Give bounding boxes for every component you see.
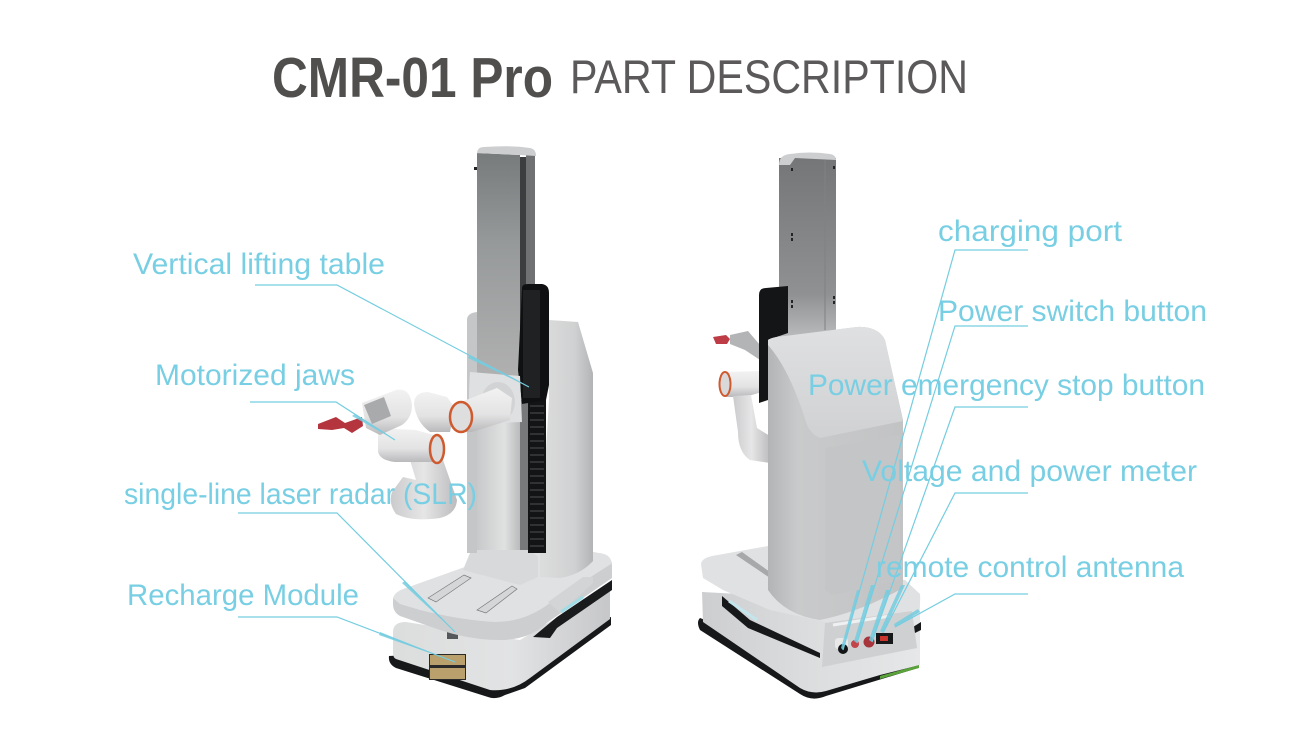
title: product name: CMR-01 Pro bbox=[272, 46, 553, 110]
lower link bbox=[391, 460, 457, 519]
lower base bbox=[702, 592, 920, 692]
column base wedge bbox=[463, 548, 538, 585]
voltage meter bbox=[876, 633, 893, 644]
cabinet top panel bbox=[768, 327, 903, 438]
label: laser radar: single-line laser radar (SLR) bbox=[124, 478, 477, 511]
elbow joint with orange ring bbox=[378, 428, 437, 462]
robot arm bbox=[318, 388, 512, 519]
upper deck bbox=[393, 545, 612, 640]
leader: charging port bbox=[843, 250, 1028, 650]
callout labels bbox=[124, 215, 1207, 612]
arm lower link bbox=[733, 395, 770, 463]
leader line tapered ends bbox=[352, 355, 920, 662]
rear black band bbox=[533, 580, 612, 638]
label: voltage and power meter: Voltage and power meter bbox=[862, 455, 1197, 488]
cabinet inset panel bbox=[825, 435, 900, 595]
upper link cylinder bbox=[461, 388, 512, 432]
deck side slat bbox=[548, 577, 593, 613]
leader: vertical lifting table bbox=[255, 285, 529, 387]
cabinet body bbox=[768, 327, 903, 620]
panel light strip bbox=[833, 616, 890, 625]
laser radar bbox=[447, 628, 458, 639]
shoulder orange ring bbox=[450, 402, 472, 432]
rail left bbox=[428, 575, 471, 602]
lower base bbox=[393, 585, 610, 690]
mounting flange bbox=[481, 382, 515, 422]
slot reflection bbox=[729, 601, 757, 620]
label: vertical lifting table: Vertical lifting table bbox=[133, 248, 385, 281]
column top cap bbox=[779, 152, 836, 165]
accordion cover bbox=[528, 396, 546, 553]
arm gripper bbox=[713, 335, 730, 344]
charging port bbox=[835, 638, 848, 649]
left robot bbox=[318, 146, 612, 698]
mounting plate bbox=[469, 372, 522, 424]
column top cap bbox=[477, 146, 536, 156]
rear column housing bbox=[467, 312, 477, 553]
leader lines bbox=[238, 250, 1028, 662]
arm wrist bbox=[730, 331, 760, 360]
title bbox=[272, 46, 968, 110]
right robot bbox=[698, 152, 921, 699]
deck top surface bbox=[393, 545, 611, 622]
green accent strip bbox=[880, 665, 919, 679]
upper deck bbox=[701, 546, 920, 623]
column bolts bbox=[791, 166, 835, 308]
right black slot bbox=[913, 622, 921, 634]
leader: remote antenna bbox=[895, 594, 1028, 627]
label: charging port: charging port bbox=[938, 215, 1123, 248]
rear column bbox=[779, 158, 836, 340]
black side panel bbox=[759, 286, 788, 403]
leader: power switch bbox=[857, 326, 1028, 643]
slat reflection bbox=[561, 597, 583, 612]
leader: recharge module bbox=[238, 617, 455, 662]
label: power emergency stop button: Power emergency stop button bbox=[808, 369, 1205, 402]
leader: laser radar bbox=[238, 513, 455, 632]
rail right bbox=[477, 586, 517, 613]
base wheels and black skirt bbox=[389, 617, 611, 698]
power switch button bbox=[851, 640, 859, 648]
arm joint with orange ring bbox=[725, 371, 762, 397]
control panel bbox=[822, 611, 917, 667]
emergency stop button bbox=[864, 636, 874, 648]
title: part description: PART DESCRIPTION bbox=[570, 50, 968, 103]
shoulder elbow bbox=[414, 392, 455, 432]
label: recharge module: Recharge Module bbox=[127, 579, 359, 612]
column side faces bbox=[520, 157, 527, 377]
label: power switch button: Power switch button bbox=[938, 295, 1207, 328]
black side panel bbox=[518, 284, 549, 404]
base black skirt bbox=[698, 618, 920, 699]
left black slot bbox=[722, 596, 820, 658]
wrist cylinder bbox=[362, 390, 412, 435]
lower column bbox=[477, 395, 527, 550]
label: remote control antenna: remote control antenna bbox=[876, 551, 1184, 584]
motorized jaws bbox=[318, 417, 363, 433]
column front bbox=[477, 153, 520, 376]
recharge module bbox=[429, 654, 466, 680]
leader: emergency stop bbox=[872, 407, 1028, 642]
leader: motorized jaws bbox=[250, 402, 395, 440]
label: motorized jaws: Motorized jaws bbox=[155, 359, 355, 392]
deck rear rail bbox=[736, 552, 770, 578]
leader: voltage meter bbox=[883, 493, 1028, 633]
